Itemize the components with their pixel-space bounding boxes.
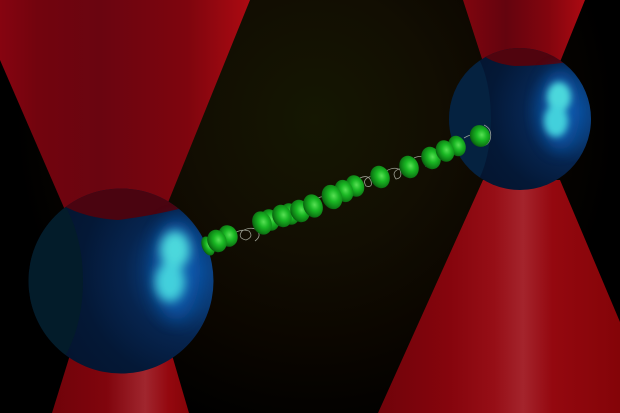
laser cone: upper left	[0, 0, 250, 210]
right sphere: red cone seen through top	[486, 48, 564, 66]
left trapped sphere	[28, 188, 214, 374]
left sphere: dim crescent	[28, 207, 83, 354]
left sphere: red cone seen through top	[66, 188, 179, 220]
laser cone: lower left	[52, 355, 189, 413]
right sphere: blue glow	[540, 70, 580, 150]
green bead chain	[199, 122, 493, 258]
laser cone: lower right	[378, 180, 620, 413]
laser cone: upper right	[463, 0, 585, 62]
right trapped sphere	[449, 48, 591, 190]
right sphere: dim crescent	[449, 60, 491, 178]
left sphere: cyan highlight	[155, 231, 190, 302]
coil: thin grey helical strand	[231, 125, 491, 241]
right sphere: cyan highlight	[544, 82, 571, 137]
left sphere: blue glow	[152, 220, 200, 320]
